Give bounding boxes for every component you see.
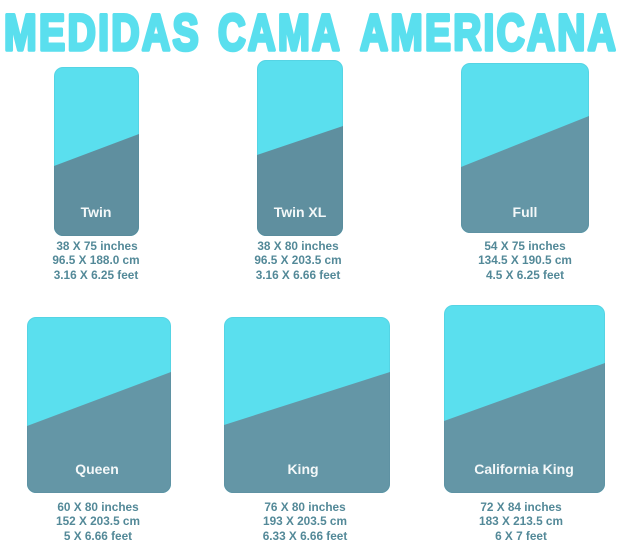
Full dimensions: 54 X 75 inches	[484, 239, 566, 253]
panel: Queen	[27, 317, 171, 543]
Full dimensions: 4.5 X 6.25 feet	[486, 268, 564, 282]
Twin dimensions: 96.5 X 188.0 cm	[52, 253, 140, 267]
Full mattress	[461, 63, 589, 233]
Queen mattress	[27, 317, 171, 493]
Twin dimensions: 3.16 X 6.25 feet	[54, 268, 138, 282]
Full label: Full	[513, 204, 537, 220]
Queen dimensions: 152 X 203.5 cm	[56, 514, 140, 528]
King dimensions: 193 X 203.5 cm	[263, 514, 347, 528]
title: CAMA	[218, 4, 342, 61]
King dimensions	[263, 500, 347, 543]
panel: King	[224, 317, 390, 543]
panel: Twin XL	[254, 60, 343, 282]
King label: King	[287, 461, 319, 477]
California King dimensions: 72 X 84 inches	[480, 500, 562, 514]
King dimensions: 76 X 80 inches	[264, 500, 346, 514]
Queen dimensions	[56, 500, 140, 543]
California King dimensions: 183 X 213.5 cm	[479, 514, 563, 528]
Twin dimensions	[52, 239, 140, 282]
Full dimensions: 134.5 X 190.5 cm	[478, 253, 572, 267]
California King dimensions	[479, 500, 563, 543]
Full dimensions	[478, 239, 572, 282]
Twin dimensions: 38 X 75 inches	[56, 239, 138, 253]
panel: Full	[461, 63, 589, 282]
Queen dimensions: 60 X 80 inches	[57, 500, 139, 514]
Twin XL dimensions: 96.5 X 203.5 cm	[254, 253, 342, 267]
Twin XL dimensions	[254, 239, 342, 282]
Twin XL dimensions: 3.16 X 6.66 feet	[256, 268, 340, 282]
Queen label: Queen	[75, 461, 119, 477]
King dimensions: 6.33 X 6.66 feet	[263, 529, 347, 543]
Queen dimensions: 5 X 6.66 feet	[64, 529, 132, 543]
title	[4, 4, 618, 61]
California King label: California King	[474, 461, 574, 477]
Twin XL label: Twin XL	[274, 204, 327, 220]
Twin mattress	[54, 67, 139, 236]
title: MEDIDAS	[4, 4, 201, 61]
panel: California King	[444, 305, 605, 543]
Twin XL dimensions: 38 X 80 inches	[257, 239, 339, 253]
Twin label: Twin	[81, 204, 111, 220]
panel: Twin	[52, 67, 140, 282]
California King dimensions: 6 X 7 feet	[495, 529, 547, 543]
King mattress	[224, 317, 390, 493]
California King mattress	[444, 305, 605, 493]
Twin XL mattress	[257, 60, 343, 236]
